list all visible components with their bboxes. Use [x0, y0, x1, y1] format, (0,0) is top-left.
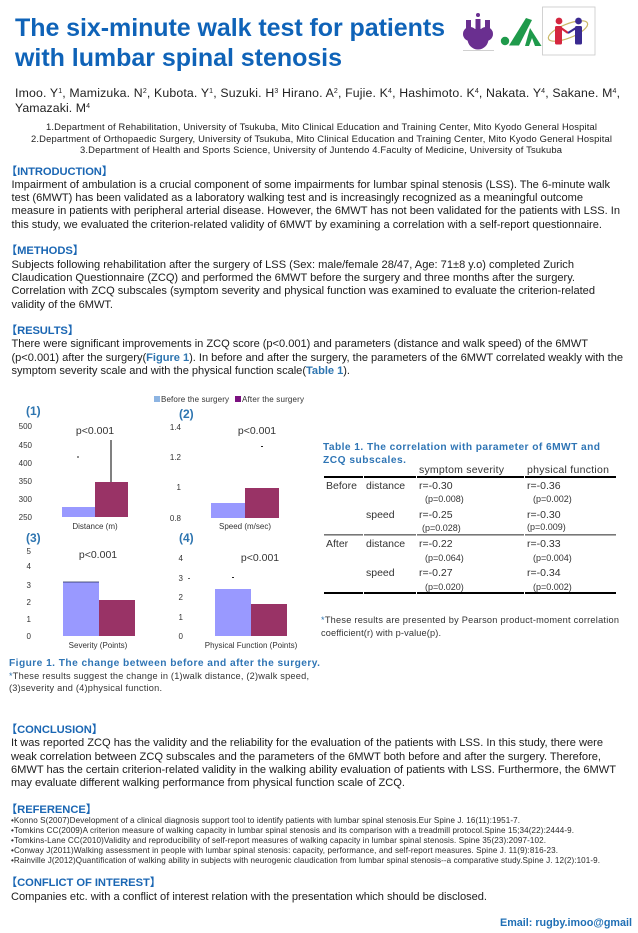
reference list: •Tomkins CC(2009)A criterion measure of walking capacity in lumbar spinal stenosis and its comparison with a treadmill protocol.Spine 15;34(22):2444-9. [11, 826, 574, 835]
icon: university crest logo [463, 13, 494, 51]
chart 1: distance: p<0.001 [76, 425, 114, 437]
introduction heading: 【INTRODUCTION】 [6, 165, 113, 178]
table 1: speed [366, 567, 395, 579]
figure note: *These results suggest the change in (1)walk distance, (2)walk speed, [9, 671, 309, 681]
results text: (p<0.001) after the surgery(Figure 1). In before and after the surgery, the parameters of the 6MWT correlated weakly with the [12, 352, 623, 364]
reference list: •Konno S(2007)Development of a clinical diagnosis support tool to identify patients with lumbar spinal stenosis.Eur Spine J. 16(11):1951-7. [11, 816, 520, 825]
introduction text: test (6MWT) has been validated as a laboratory walking test and is increasingly recognized as a meaningful outcome [12, 192, 583, 204]
reference list: •Tomkins-Lane CC(2010)Validity and reproducibility of self-report measures of walking capacity in lumbar spinal stenosis. Spine 35(23):2097-102. [11, 836, 546, 845]
title [14, 14, 445, 72]
table 1: speed [366, 509, 395, 521]
reference heading: 【REFERENCE】 [6, 803, 97, 816]
chart 4: physical function: 0 [179, 632, 184, 641]
conflict of interest heading: 【CONFLICT OF INTEREST】 [6, 876, 161, 889]
authors: , Kubota. Y [147, 86, 209, 100]
table 1: r=-0.34 [527, 567, 561, 579]
authors: , Hashimoto. K [392, 86, 475, 100]
introduction text: measure in patients with peripheral arterial disease. However, the 6MWT has not been validated for the patients with LSS. In [12, 205, 620, 217]
chart 1: distance: 250 [19, 513, 33, 522]
figure note [9, 671, 309, 693]
table 1: r=-0.33 [527, 538, 561, 550]
chart 1: distance: 500 [19, 422, 33, 431]
table title [323, 442, 600, 466]
table title: Table 1. The correlation with parameter of 6MWT and [323, 442, 600, 453]
authors: 2 [334, 88, 338, 95]
table 1: (p=0.009) [527, 522, 566, 532]
chart 3: severity: 2 [27, 598, 32, 607]
table 1: distance [366, 480, 405, 492]
table 1: After [326, 538, 349, 550]
chart 2: speed: Speed (m/sec) [219, 522, 271, 531]
conclusion text: It was reported ZCQ has the validity and the reliability for the evaluation of the patients with LSS. In this study, there were [11, 737, 603, 749]
methods heading: 【METHODS】 [6, 244, 84, 257]
figure note: (3)severity and (4)physical function. [9, 683, 162, 693]
table 1: (p=0.004) [533, 553, 572, 563]
chart 1: distance: 350 [19, 477, 33, 486]
affiliations: 2.Department of Orthopaedic Surgery, University of Tsukuba, Mito Clinical Education and Training Center, Mito Kyodo General Hospital [31, 133, 612, 144]
chart 2: speed: 1.4 [170, 423, 182, 432]
chart 1: distance: Distance (m) [72, 522, 118, 531]
introduction text: this study, we evaluated the criterion-related validity of 6MWT by examining a correlation with a self-report questionnaire. [12, 219, 602, 231]
authors: , Fujie. K [338, 86, 389, 100]
authors: Imoo. Y [15, 86, 58, 100]
chart 4: physical function [179, 531, 298, 650]
table 1: Before [326, 480, 357, 492]
icon: handshake logo [542, 7, 595, 55]
authors: , Nakata. Y [479, 86, 541, 100]
chart 1: distance: 300 [19, 495, 33, 504]
methods text: Correlation with ZCQ subscales (symptom severity and physical function was examined to evaluate the criterion-related [12, 285, 595, 297]
methods text: Claudication Questionnaire (ZCQ) and performed the 6MWT before the surgery and three months after the surgery. [12, 272, 575, 284]
authors: Hirano. A [278, 86, 335, 100]
chart 4: physical function: Physical Function (Points) [205, 641, 298, 650]
chart 1: distance: 400 [19, 459, 33, 468]
chart 2: speed: p<0.001 [238, 425, 276, 437]
conclusion heading: 【CONCLUSION】 [6, 723, 103, 736]
chart 3: severity: 3 [27, 581, 32, 590]
table 1: distance [366, 538, 405, 550]
authors: 4 [86, 103, 90, 110]
chart 4: physical function: 2 [179, 593, 184, 602]
chart 3: severity: 0 [27, 632, 32, 641]
affiliations [31, 121, 612, 155]
methods text: Subjects following rehabilitation after the surgery of LSS (Sex: male/female 28/47, Age: 71±8 y.o) completed Zurich [12, 259, 574, 271]
table note [321, 615, 619, 638]
table 1: r=-0.25 [419, 509, 453, 521]
results heading: 【RESULTS】 [6, 324, 79, 337]
chart 1: distance: (1) [26, 404, 41, 418]
chart 3: severity: Severity (Points) [69, 641, 128, 650]
authors: 1 [58, 88, 62, 95]
chart 1: distance: 450 [19, 441, 33, 450]
chart 3: severity: p<0.001 [79, 549, 117, 561]
chart 3: severity: (3) [26, 531, 41, 545]
table 1: (p=0.008) [425, 494, 464, 504]
reference list [11, 816, 600, 865]
table 1: (p=0.028) [422, 523, 461, 533]
title: The six-minute walk test for patients [15, 14, 445, 42]
table 1: (p=0.002) [533, 582, 572, 592]
affiliations: 3.Department of Health and Sports Science, University of Juntendo 4.Faculty of Medicine, University of Tsukuba [80, 144, 563, 155]
table title: ZCQ subscales. [323, 455, 406, 466]
table 1: r=-0.22 [419, 538, 453, 550]
conclusion text: 6MWT has the certain criterion-related validity in the walking ability evaluation of patients with LSS. Furthermore, the 6MWT [11, 764, 616, 776]
chart 2: speed: 1.2 [170, 453, 182, 462]
chart 3: severity: 4 [27, 562, 32, 571]
chart 4: physical function: 1 [179, 613, 184, 622]
authors: 4 [475, 88, 479, 95]
chart 4: physical function: 4 [179, 554, 184, 563]
reference list: •Conway J(2011)Walking assessment in people with lumbar spinal stenosis: capacity, performance, and self-report measures. Spine J. 11(9):816-23. [11, 846, 558, 855]
results text [12, 338, 623, 377]
results text: There were significant improvements in ZCQ score (p<0.001) and parameters (distance and walk speed) of the 6MWT [12, 338, 588, 350]
chart 4: physical function: 3 [179, 574, 184, 583]
methods text: validity of the 6MWT. [12, 299, 113, 311]
icon: JA green logo [501, 18, 542, 46]
results text: symptom severity scale and with the physical function scale(Table 1). [12, 365, 350, 377]
table 1: symptom severity [419, 464, 505, 476]
authors: 4 [541, 88, 545, 95]
table 1: r=-0.36 [527, 480, 561, 492]
authors: 4 [613, 88, 617, 95]
chart 2: speed [170, 407, 279, 531]
table 1: r=-0.30 [527, 509, 561, 521]
title: with lumbar spinal stenosis [14, 44, 342, 72]
authors: 1 [209, 88, 213, 95]
conflict of interest text: Companies etc. with a conflict of interest relation with the presentation which should be disclosed. [11, 891, 487, 903]
table note: coefficient(r) with p-value(p). [321, 628, 441, 638]
introduction text [12, 179, 620, 231]
chart 2: speed: 0.8 [170, 514, 182, 523]
authors: Yamazaki. M [15, 101, 86, 115]
chart 4: physical function: p<0.001 [241, 552, 279, 564]
table 1: physical function [527, 464, 609, 476]
conclusion text [10, 737, 616, 789]
chart legend: Before the surgery [161, 395, 229, 404]
chart 3: severity: 1 [27, 615, 32, 624]
introduction text: Impairment of ambulation is a crucial component of some impairments for lumbar spinal stenosis (LSS). The 6-minute walk [12, 179, 610, 191]
table 1 [324, 464, 616, 594]
chart legend [154, 395, 304, 404]
reference list: •Rainville J(2012)Quantification of walking ability in subjects with neurogenic claudication from lumbar spinal stenosis--a comparative study.Spine J. 12(2):101-9. [11, 856, 600, 865]
table 1: (p=0.020) [425, 582, 464, 592]
table 1: (p=0.064) [425, 553, 464, 563]
affiliations: 1.Department of Rehabilitation, University of Tsukuba, Mito Clinical Education and Training Center, Mito Kyodo General Hospital [46, 121, 597, 132]
table note: *These results are presented by Pearson product-moment correlation [321, 615, 619, 625]
authors [15, 86, 620, 115]
chart 3: severity [26, 531, 135, 650]
chart 2: speed: (2) [179, 407, 194, 421]
authors: 3 [274, 88, 278, 95]
chart 1: distance [19, 404, 128, 531]
chart 3: severity: 5 [27, 547, 32, 556]
figure caption: Figure 1. The change between before and after the surgery. [9, 658, 320, 669]
table 1: r=-0.30 [419, 480, 453, 492]
authors: , Sakane. M [545, 86, 612, 100]
methods text [12, 259, 595, 311]
chart 4: physical function: (4) [179, 531, 194, 545]
conclusion text: weak correlation between ZCQ subscales and the parameters of the 6MWT both before and after the surgery. Therefore, [10, 751, 601, 763]
email: Email: rugby.imoo@gmail [500, 917, 632, 929]
chart 2: speed: 1 [177, 483, 182, 492]
conclusion text: may evaluate different walking performance from physical function scale of ZCQ. [11, 777, 405, 789]
table 1: (p=0.002) [533, 494, 572, 504]
chart legend: After the surgery [242, 395, 304, 404]
authors: , Mamizuka. N [62, 86, 143, 100]
authors: , [617, 86, 620, 100]
authors: 2 [143, 88, 147, 95]
authors: , Suzuki. H [213, 86, 274, 100]
table 1: r=-0.27 [419, 567, 453, 579]
authors: 4 [388, 88, 392, 95]
